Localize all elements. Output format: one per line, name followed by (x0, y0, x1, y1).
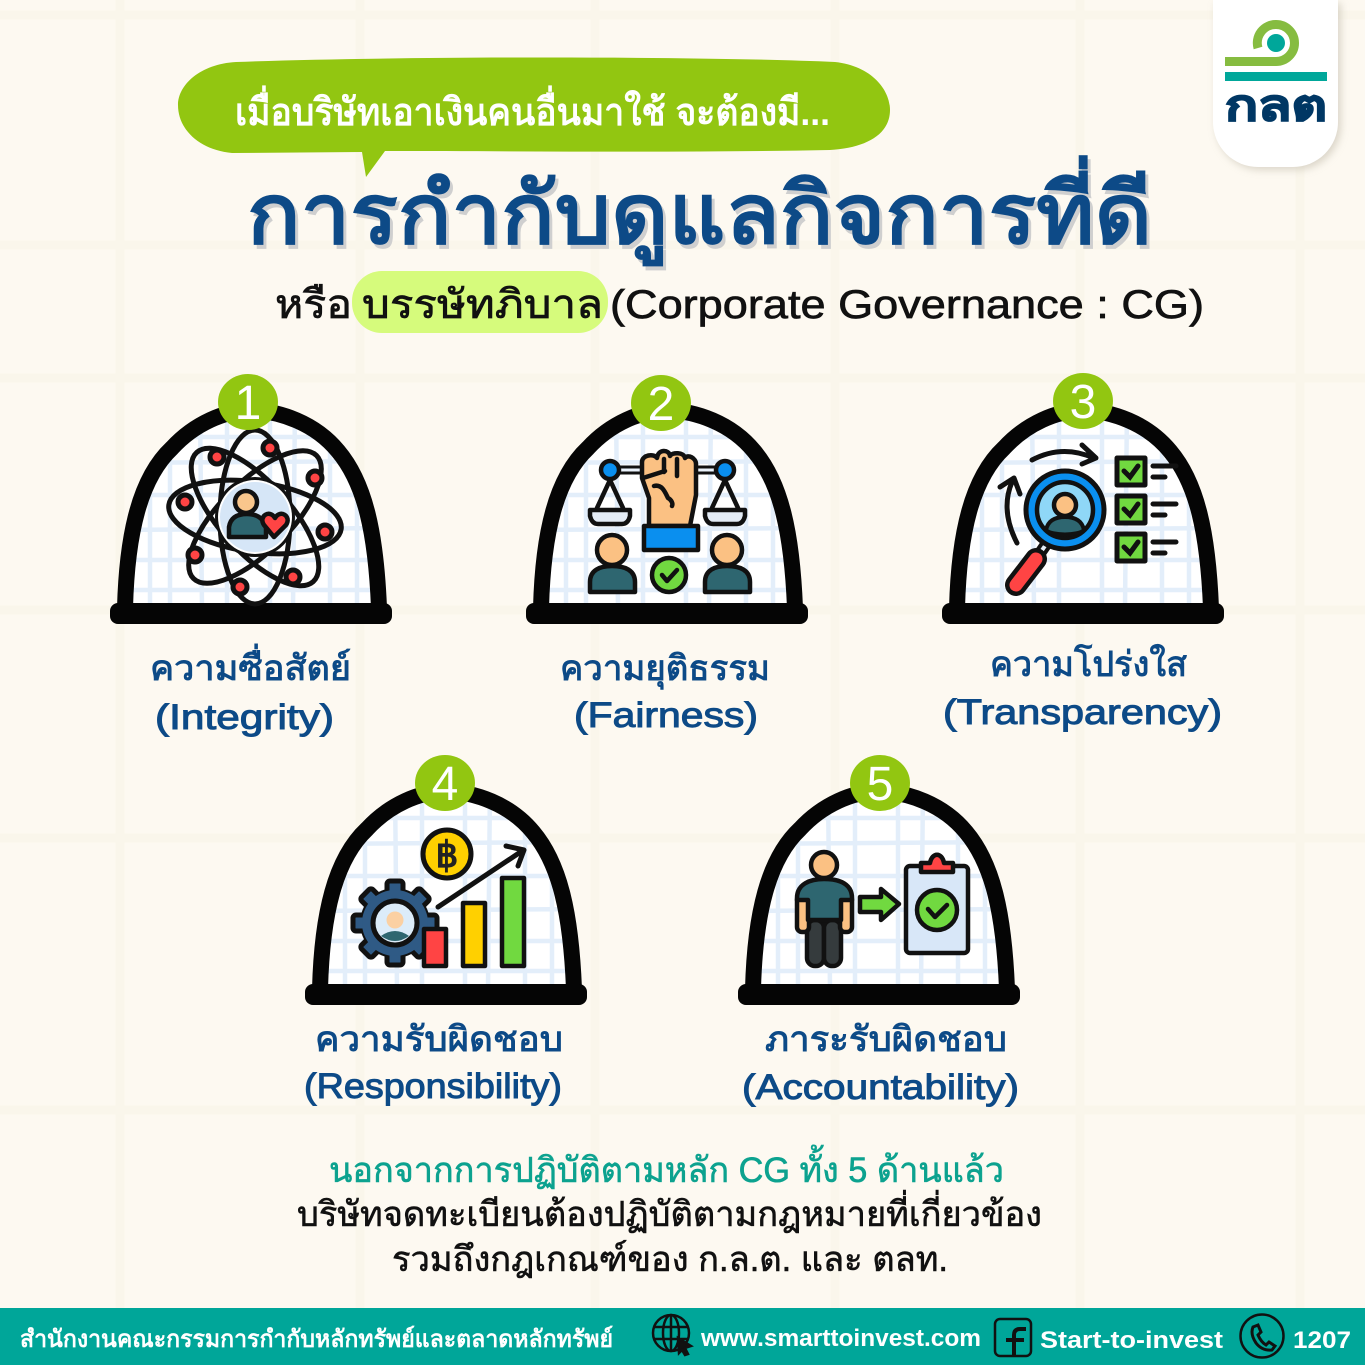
panel: transparency (942, 403, 1224, 624)
label: responsibility: ความรับผิดชอบ (315, 1020, 563, 1059)
icon: scales and fist (590, 451, 750, 592)
icon: atom with person and heart (164, 429, 346, 605)
label: transparency: (Transparency) (943, 693, 1222, 732)
subtitle: หรือ (275, 283, 352, 327)
number badge 4: 4 (432, 758, 458, 811)
footer bar (0, 1308, 1365, 1365)
label: accountability: (Accountability) (742, 1068, 1019, 1107)
subtitle (275, 271, 1204, 333)
label: accountability: ภาระรับผิดชอบ (765, 1020, 1007, 1059)
label: integrity (150, 644, 351, 737)
label: responsibility: (Responsibility) (304, 1067, 562, 1106)
label: transparency: ความโปร่งใส (990, 644, 1187, 684)
title: การกำกับดูแลกิจการที่ดี (247, 155, 1152, 267)
label: fairness (560, 649, 770, 735)
closing note: นอกจากการปฏิบัติตามหลัก CG ทั้ง 5 ด้านแล้ว (329, 1144, 1004, 1190)
logo (1213, 0, 1341, 170)
icon: magnifier and checklist (1000, 445, 1176, 585)
number badge 1: 1 (235, 377, 261, 430)
number badge 5: 5 (867, 758, 893, 811)
closing note: รวมถึงกฎเกณฑ์ของ ก.ล.ต. และ ตลท. (392, 1240, 948, 1279)
footer bar: www.smarttoinvest.com (700, 1325, 981, 1352)
logo: กลต (1225, 82, 1327, 129)
number badge 2 (631, 375, 691, 431)
number badge 3: 3 (1070, 376, 1096, 429)
icon: gear coin and growth bars: ฿ (436, 834, 458, 875)
footer bar: สำนักงานคณะกรรมการกำกับหลักทรัพย์และตลาดหลักทรัพย์ (20, 1325, 613, 1353)
closing note (297, 1144, 1042, 1279)
label: fairness: ความยุติธรรม (560, 649, 770, 689)
subtitle: บรรษัทภิบาล (362, 283, 603, 327)
number badge 1 (218, 374, 278, 430)
closing note: บริษัทจดทะเบียนต้องปฏิบัติตามกฎหมายที่เกี่ยวข้อง (297, 1190, 1042, 1234)
panel: responsibility (305, 784, 587, 1005)
icon: phone (1240, 1314, 1284, 1358)
number badge 4 (415, 755, 475, 811)
icon: globe (653, 1315, 691, 1355)
label: responsibility (304, 1020, 563, 1106)
icon: person arrow and clipboard (797, 852, 968, 966)
speech bubble (178, 58, 890, 177)
label: transparency (943, 644, 1222, 732)
number badge 3 (1053, 373, 1113, 429)
footer bar: 1207 (1293, 1327, 1351, 1354)
number badge 2: 2 (648, 378, 674, 431)
panel: integrity (110, 403, 392, 624)
speech bubble: เมื่อบริษัทเอาเงินคนอื่นมาใช้ จะต้องมี... (235, 85, 830, 134)
subtitle: (Corporate Governance : CG) (610, 283, 1204, 327)
panel: accountability (738, 784, 1020, 1005)
label: integrity: (Integrity) (155, 698, 334, 737)
number badge 5 (850, 755, 910, 811)
label: integrity: ความซื่อสัตย์ (150, 644, 351, 688)
panel: fairness (526, 403, 808, 624)
label: accountability (742, 1020, 1019, 1107)
icon: facebook (995, 1319, 1031, 1356)
title: การกำกับดูแลกิจการที่ดี (250, 159, 1155, 271)
footer bar: Start-to-invest (1040, 1327, 1223, 1354)
icon: gear coin and growth bars (353, 830, 524, 966)
label: fairness: (Fairness) (574, 696, 758, 735)
